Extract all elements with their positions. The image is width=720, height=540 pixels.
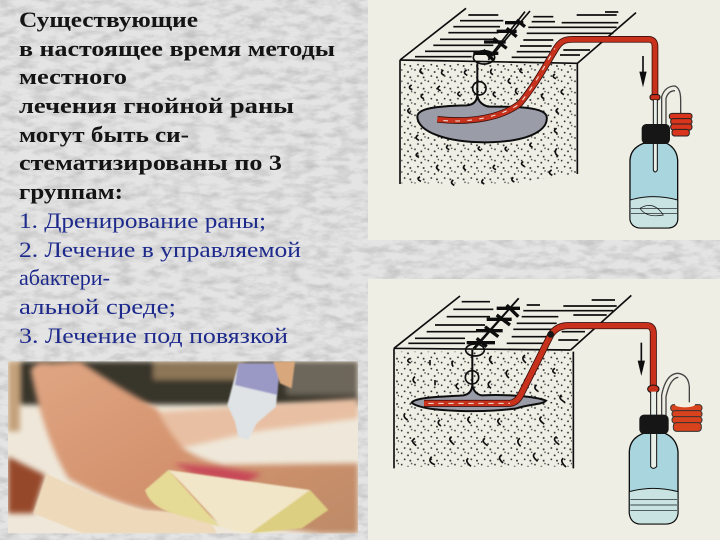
panel: drainage diagram, shallow wound [368, 279, 720, 540]
tissue block with speckles [394, 348, 573, 468]
heading: могут быть си- [19, 122, 189, 147]
list of methods: 2. Лечение в управляемой [19, 237, 301, 262]
foam dressing [145, 470, 328, 533]
list of methods [19, 208, 301, 348]
heading: группам: [19, 179, 123, 204]
panel background [368, 0, 720, 240]
text block: methods of local wound treatment [19, 7, 335, 348]
photo backdrop [8, 361, 358, 533]
tissue block with speckles [400, 60, 577, 185]
gloved hand [33, 474, 217, 533]
list of methods: абактери- [19, 265, 110, 290]
dark room background [8, 361, 358, 431]
panel background [368, 279, 720, 540]
list of methods: альной среде; [19, 294, 176, 319]
panel: drainage diagram, deep wound [368, 0, 720, 240]
heading: лечения гнойной раны [19, 93, 294, 118]
collection bottle [629, 373, 702, 524]
wound redness [173, 463, 262, 484]
sutures [465, 298, 520, 384]
collection bottle [630, 86, 692, 228]
heading: Существующие [19, 7, 198, 32]
list of methods: 3. Лечение под повязкой [19, 323, 288, 348]
dark reddish arm at left [8, 457, 45, 513]
heading: стематизированы по 3 [19, 150, 282, 175]
skin surface with hatching [400, 8, 636, 63]
saline bottle [227, 361, 295, 440]
forearm in background [140, 398, 358, 448]
skin surface with hatching [394, 295, 631, 350]
list of methods: 1. Дренирование раны; [19, 208, 266, 233]
heading: в настоящее время методы [19, 36, 335, 61]
flow arrow [640, 56, 645, 75]
photo: wound dressing treatment [8, 361, 358, 533]
drain tube [437, 39, 660, 121]
heading [19, 7, 335, 204]
foot [31, 361, 358, 533]
wound cavity [412, 350, 546, 411]
flow arrow [639, 343, 644, 363]
sutures [473, 12, 525, 95]
wound cavity [417, 63, 547, 142]
drain tube [424, 326, 659, 403]
heading: местного [19, 64, 127, 89]
